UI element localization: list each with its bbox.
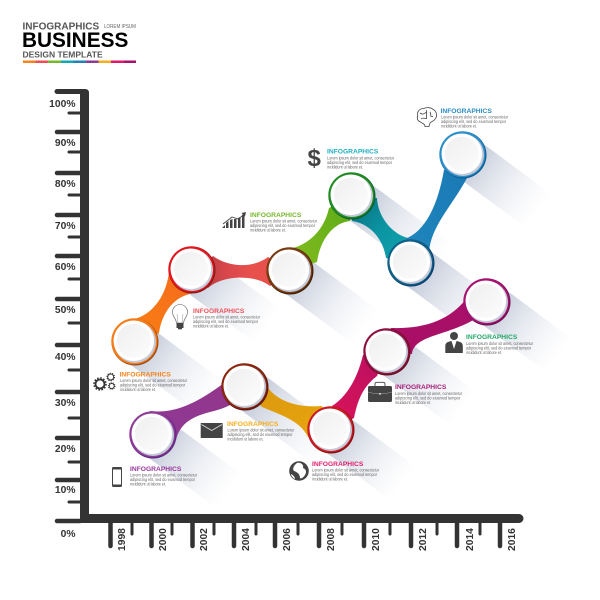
y axis labels: 70% bbox=[55, 221, 76, 232]
text block: pink: incididunt ut labore et. bbox=[312, 476, 348, 481]
node: purple bbox=[129, 411, 176, 458]
text block: orange bbox=[120, 372, 187, 392]
y axis labels: 20% bbox=[55, 444, 76, 455]
node: maroon bbox=[363, 328, 410, 376]
icon: globe bbox=[289, 461, 309, 481]
icon: light bulb bbox=[172, 305, 188, 329]
text block: emerald bbox=[466, 334, 533, 355]
text block: red: incididunt ut labore et. bbox=[193, 323, 229, 328]
text block: cyan: incididunt ut labore et. bbox=[327, 164, 363, 169]
text block: purple: INFOGRAPHICS bbox=[130, 466, 182, 473]
x axis labels: 2006 bbox=[282, 528, 293, 551]
text block: orange: Lorem ipsum dolor sit amet, consectetur bbox=[120, 378, 187, 383]
node: dark red brown bbox=[221, 363, 268, 410]
text block: gold: Lorem ipsum dolor sit amet, consectetur bbox=[228, 428, 295, 433]
icon: brain bbox=[417, 108, 437, 126]
text block: green bbox=[250, 212, 317, 232]
text block: pink: adipiscing elit, sed do eiusmod tempor bbox=[312, 472, 378, 477]
long shadows bbox=[123, 138, 572, 508]
y axis labels: 100% bbox=[49, 99, 76, 110]
text block: cyan: INFOGRAPHICS bbox=[327, 148, 379, 156]
node: orange bbox=[111, 318, 158, 366]
text block: purple bbox=[130, 466, 197, 486]
node: green bbox=[328, 172, 376, 220]
x axis labels: 2014 bbox=[465, 528, 476, 551]
text block: crimson bbox=[395, 384, 462, 405]
icon: bar chart with arrow bbox=[222, 212, 246, 228]
x axis labels: 2008 bbox=[326, 528, 337, 551]
text block: pink bbox=[312, 461, 379, 481]
header title block: DESIGN TEMPLATE bbox=[22, 50, 103, 60]
x axis labels: 1998 bbox=[117, 528, 128, 551]
text block: crimson: incididunt ut labore et. bbox=[395, 400, 431, 405]
text block: purple: incididunt ut labore et. bbox=[130, 482, 166, 486]
x axis labels: 2004 bbox=[241, 528, 252, 551]
text block: purple: Lorem ipsum dolor sit amet, consectetur bbox=[130, 472, 197, 478]
text block: red: Lorem ipsum dolor sit amet, consectetur bbox=[193, 314, 260, 319]
text block: green: Lorem ipsum dolor sit amet, consectetur bbox=[250, 218, 317, 224]
x axis labels: 2016 bbox=[507, 528, 518, 551]
x axis labels: 2012 bbox=[418, 528, 429, 551]
node: magenta bbox=[463, 278, 510, 326]
y axis labels: 30% bbox=[55, 398, 76, 409]
text block: green: incididunt ut labore et. bbox=[250, 228, 286, 232]
x axis labels: 2002 bbox=[199, 528, 210, 551]
text block: pink: INFOGRAPHICS bbox=[312, 461, 364, 468]
icon: smartphone bbox=[112, 467, 122, 487]
icon: businessman bbox=[445, 332, 463, 353]
x axis labels: 2000 bbox=[158, 528, 169, 551]
text block: blue: adipiscing elit, sed do eiusmod tempor bbox=[441, 119, 507, 124]
text block: red: adipiscing elit, sed do eiusmod tempor bbox=[193, 319, 259, 324]
text block: orange: adipiscing elit, sed do eiusmod tempor bbox=[120, 382, 186, 388]
text block: pink: Lorem ipsum dolor sit amet, consectetur bbox=[312, 467, 379, 472]
y axis labels: 40% bbox=[55, 352, 76, 363]
text block: gold: INFOGRAPHICS bbox=[227, 421, 279, 428]
text block: crimson: Lorem ipsum dolor sit amet, consectetur bbox=[395, 391, 462, 396]
text block: green: INFOGRAPHICS bbox=[250, 212, 302, 219]
node: brown bbox=[266, 247, 314, 294]
text block: gold bbox=[227, 421, 295, 442]
text block: green: adipiscing elit, sed do eiusmod tempor bbox=[250, 223, 316, 228]
text block: cyan: adipiscing elit, sed do eiusmod tempor bbox=[327, 160, 393, 165]
y axis labels: 50% bbox=[55, 305, 76, 316]
header title block: BUSINESS bbox=[22, 29, 128, 52]
icon: gears bbox=[94, 373, 115, 390]
node: crimson bbox=[307, 406, 354, 454]
text block: cyan bbox=[327, 148, 394, 169]
text block: crimson: INFOGRAPHICS bbox=[395, 384, 447, 391]
text block: blue: Lorem ipsum dolor sit amet, consectetur bbox=[441, 114, 508, 119]
y axis labels: 0% bbox=[61, 529, 76, 540]
text block: gold: incididunt ut labore et. bbox=[228, 437, 264, 442]
y axis labels: 90% bbox=[55, 138, 76, 149]
text block: purple: adipiscing elit, sed do eiusmod tempor bbox=[130, 477, 196, 482]
text block: emerald: Lorem ipsum dolor sit amet, consectetur bbox=[466, 341, 533, 346]
ribbon connectors bbox=[135, 155, 487, 440]
icon: briefcase bbox=[368, 382, 392, 402]
text block: emerald: adipiscing elit, sed do eiusmod tempor bbox=[466, 345, 532, 350]
node: red bbox=[168, 246, 216, 294]
y axis labels: 80% bbox=[55, 179, 76, 190]
y axis labels: 60% bbox=[55, 262, 76, 273]
text block: blue bbox=[440, 108, 508, 128]
y axis labels bbox=[49, 99, 76, 540]
node: blue bbox=[439, 131, 486, 178]
node: teal navy bbox=[387, 239, 434, 286]
chart axes bbox=[55, 89, 524, 546]
text block: blue: INFOGRAPHICS bbox=[440, 108, 492, 115]
icon: dollar sign: $ bbox=[308, 145, 322, 172]
x axis labels bbox=[117, 528, 518, 551]
text block: orange: incididunt ut labore et. bbox=[120, 387, 156, 392]
text block: gold: adipiscing elit, sed do eiusmod tempor bbox=[228, 432, 293, 437]
text block: emerald: INFOGRAPHICS bbox=[466, 334, 518, 341]
header title block bbox=[22, 22, 136, 63]
text block: cyan: Lorem ipsum dolor sit amet, consectetur bbox=[327, 155, 394, 160]
text block: emerald: incididunt ut labore et. bbox=[466, 350, 502, 355]
text block: blue: incididunt ut labore et. bbox=[441, 123, 477, 128]
x axis labels: 2010 bbox=[371, 528, 382, 551]
y axis labels: 10% bbox=[55, 485, 76, 496]
text block: red: INFOGRAPHICS bbox=[193, 308, 245, 315]
header title block: INFOGRAPHICS bbox=[22, 22, 100, 32]
header title block: LOREM IPSUM bbox=[104, 24, 136, 30]
text block: orange: INFOGRAPHICS bbox=[120, 372, 171, 378]
icon: envelope bbox=[201, 423, 223, 438]
text block: crimson: adipiscing elit, sed do eiusmod tempor bbox=[395, 395, 461, 400]
text block: red bbox=[193, 308, 260, 328]
